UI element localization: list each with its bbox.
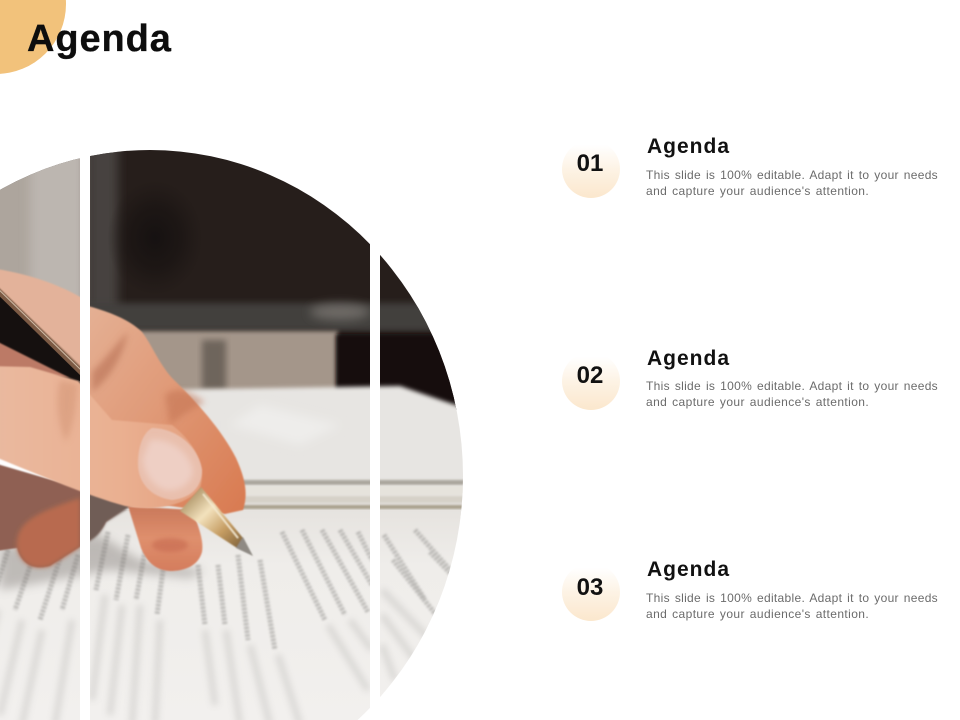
description 02	[646, 379, 938, 409]
pen tip	[180, 487, 253, 556]
middle finger under pen	[128, 506, 202, 571]
index finger	[0, 268, 82, 368]
thumbnail	[138, 428, 202, 500]
number badge 01	[562, 140, 620, 198]
description 03: This slide is 100% editable. Adapt it to your needs	[646, 591, 938, 605]
photo: hand writing with a pen, in a segmented circle	[0, 150, 463, 720]
photo background	[0, 150, 463, 720]
number 01: 01	[577, 150, 603, 177]
heading 03: Agenda	[647, 558, 730, 581]
number badge 02	[562, 352, 620, 410]
agenda item 03	[562, 558, 938, 621]
pen barrel	[0, 296, 80, 381]
description 01: and capture your audience's attention.	[646, 184, 869, 198]
description 01	[646, 168, 938, 198]
description 03	[646, 591, 938, 621]
description 03: and capture your audience's attention.	[646, 607, 869, 621]
agenda item 01	[562, 135, 938, 198]
printed text lines on paper	[0, 530, 452, 720]
vertical white gaps	[80, 140, 90, 720]
number 03: 03	[577, 574, 603, 601]
description 02: and capture your audience's attention.	[646, 395, 869, 409]
decorative corner circle	[0, 0, 66, 74]
number 02: 02	[577, 362, 603, 389]
description 02: This slide is 100% editable. Adapt it to your needs	[646, 379, 938, 393]
shadow under hand	[0, 535, 205, 590]
heading 02: Agenda	[647, 347, 730, 370]
number badge 03	[562, 563, 620, 621]
description 01: This slide is 100% editable. Adapt it to your needs	[646, 168, 938, 182]
title: Agenda	[27, 18, 172, 60]
agenda item 02	[562, 347, 938, 410]
lower fingers	[0, 462, 135, 567]
thumb	[0, 366, 202, 508]
heading 01: Agenda	[647, 135, 730, 158]
